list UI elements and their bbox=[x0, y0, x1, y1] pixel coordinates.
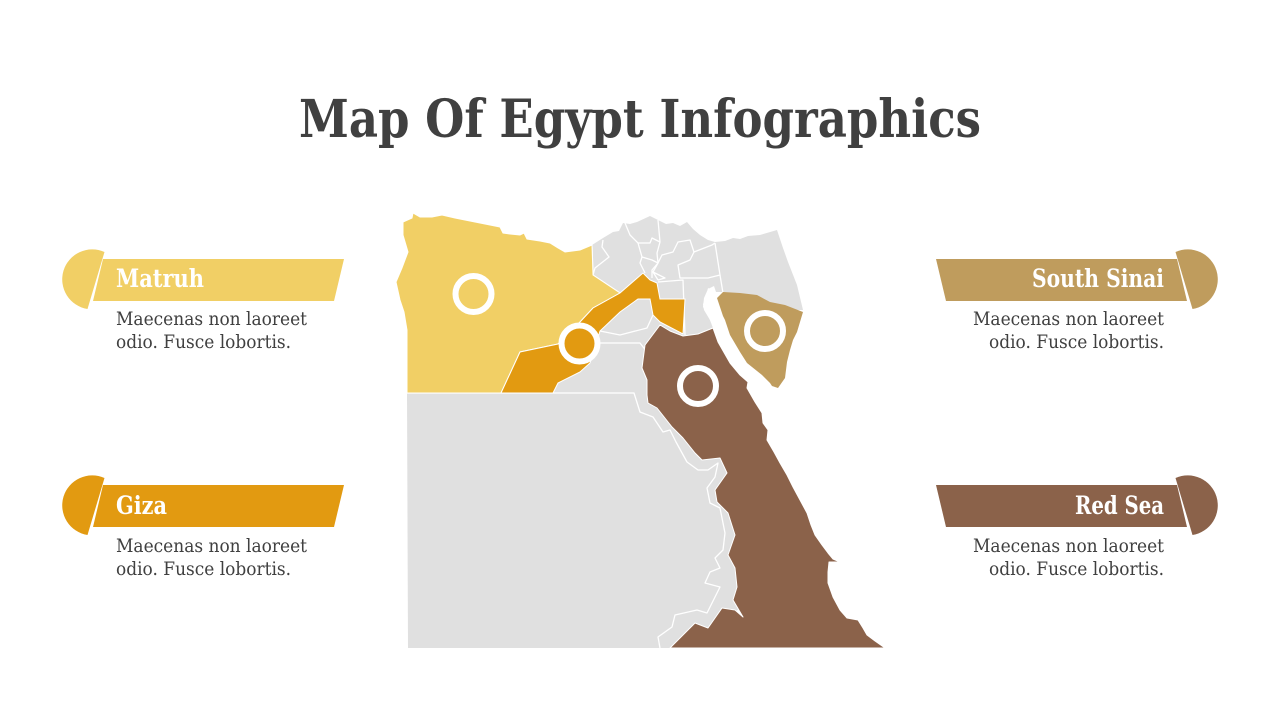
title: Map Of Egypt Infographics bbox=[299, 89, 981, 150]
label banner bbox=[93, 259, 344, 301]
icon: half circle bbox=[1176, 249, 1218, 309]
panel: South Sinai bbox=[936, 249, 1218, 353]
heading: Red Sea bbox=[1075, 491, 1164, 520]
marker: South Sinai bbox=[747, 313, 783, 349]
label banner bbox=[936, 259, 1187, 301]
text block: Maecenas non laoreet bbox=[116, 309, 308, 330]
panel: Red Sea bbox=[936, 475, 1218, 580]
region: Giza bbox=[501, 273, 685, 393]
map of Egypt bbox=[396, 213, 885, 648]
text block: odio. Fusce lobortis. bbox=[989, 559, 1164, 580]
text block: odio. Fusce lobortis. bbox=[116, 332, 291, 353]
icon: half circle bbox=[62, 475, 104, 535]
marker: Red Sea bbox=[680, 368, 716, 404]
region: South Sinai bbox=[717, 292, 803, 388]
icon: half circle bbox=[62, 249, 104, 309]
heading: Giza bbox=[116, 491, 167, 520]
marker: Giza bbox=[562, 326, 598, 362]
label banner bbox=[936, 485, 1187, 527]
icon: half circle bbox=[1176, 475, 1218, 535]
panel: Matruh bbox=[62, 249, 344, 353]
heading: South Sinai bbox=[1032, 264, 1164, 293]
text block: Maecenas non laoreet bbox=[973, 536, 1165, 557]
text block: Maecenas non laoreet bbox=[116, 536, 308, 557]
panel: Giza bbox=[62, 475, 344, 580]
text block: odio. Fusce lobortis. bbox=[989, 332, 1164, 353]
heading: Matruh bbox=[116, 264, 204, 293]
text block: Maecenas non laoreet bbox=[973, 309, 1165, 330]
label banner bbox=[93, 485, 344, 527]
region: grey governorates bbox=[407, 216, 803, 648]
region: Matruh bbox=[396, 213, 620, 393]
marker: Matruh bbox=[456, 276, 492, 312]
region: Red Sea bbox=[642, 325, 885, 648]
text block: odio. Fusce lobortis. bbox=[116, 559, 291, 580]
